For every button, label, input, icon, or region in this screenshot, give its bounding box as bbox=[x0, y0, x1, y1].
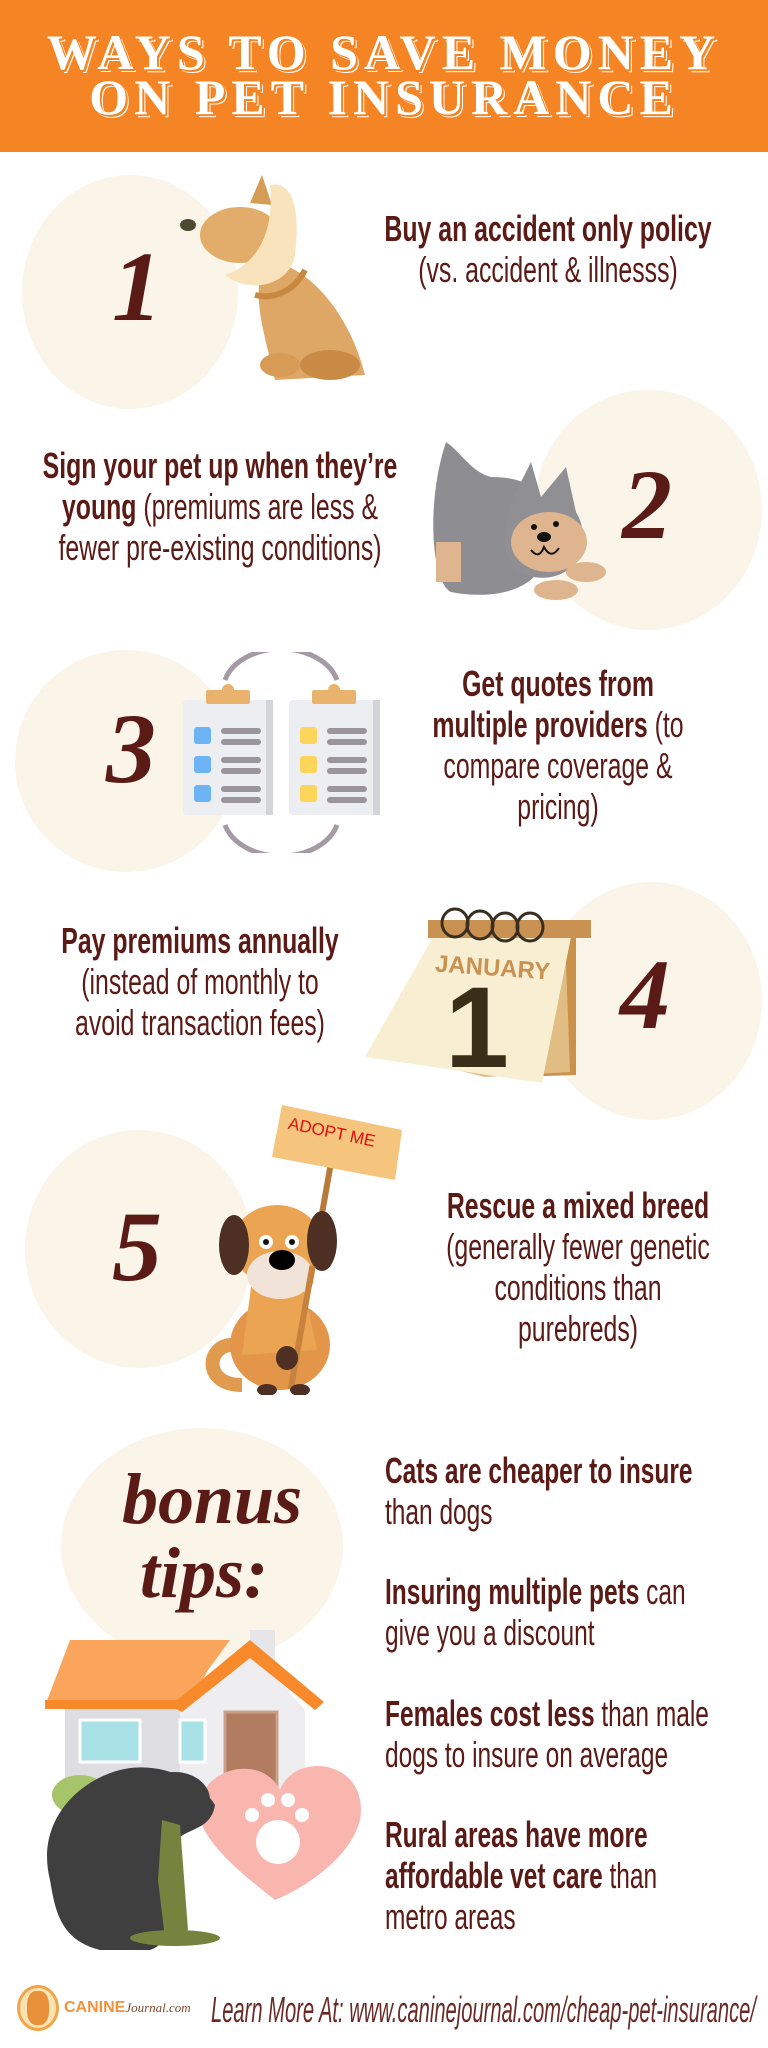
tip 2: Insuring multiple pets can bbox=[385, 1571, 686, 1612]
tip 3 bbox=[385, 1693, 709, 1775]
footer logo bbox=[17, 1985, 191, 2031]
circle 3 bbox=[15, 650, 237, 872]
text 5: conditions than bbox=[494, 1267, 662, 1308]
text 3: compare coverage & bbox=[443, 745, 673, 786]
footer logo: CANINEJournal.com bbox=[64, 1999, 191, 2016]
text 2: fewer pre-existing conditions) bbox=[58, 527, 382, 568]
text 2: Sign your pet up when they’re bbox=[43, 445, 397, 486]
tip 1 bbox=[385, 1450, 692, 1532]
bonus title: bonus bbox=[122, 1459, 302, 1539]
text 1: Buy an accident only policy bbox=[384, 208, 712, 249]
circle 4 bbox=[540, 882, 762, 1120]
text 5: Rescue a mixed breed bbox=[447, 1185, 709, 1226]
circle 1 bbox=[22, 175, 238, 409]
tip 1: than dogs bbox=[385, 1491, 493, 1532]
tip 4: metro areas bbox=[385, 1896, 516, 1937]
tip 4: Rural areas have more bbox=[385, 1814, 648, 1855]
text 5 bbox=[446, 1185, 710, 1349]
tip 4 bbox=[385, 1814, 657, 1937]
text 4: (instead of monthly to bbox=[81, 961, 319, 1002]
bonus tips text bbox=[385, 1450, 709, 1937]
circle 2 bbox=[534, 390, 762, 630]
tip 3: dogs to insure on average bbox=[385, 1734, 668, 1775]
text 3 bbox=[432, 663, 684, 827]
number 1: 1 bbox=[112, 231, 162, 342]
number 3: 3 bbox=[106, 693, 156, 804]
illustration: adopt me dog bbox=[206, 1105, 402, 1395]
bonus circle bbox=[61, 1428, 343, 1664]
footer text: Learn More At: www.caninejournal.com/cheap-pet-insurance/ bbox=[211, 1989, 756, 2030]
text 1 bbox=[384, 208, 712, 290]
illustration: adopt me dog: ADOPT ME bbox=[287, 1114, 377, 1151]
text 1: (vs. accident & illnesss) bbox=[418, 249, 678, 290]
text 4: avoid transaction fees) bbox=[75, 1002, 325, 1043]
text 3: multiple providers (to bbox=[432, 704, 684, 745]
illustration: house, cat, heart bbox=[45, 1630, 361, 1950]
tip 4: affordable vet care than bbox=[385, 1855, 657, 1896]
header: ON PET INSURANCE bbox=[89, 69, 679, 125]
number 5: 5 bbox=[112, 1191, 162, 1302]
tip 3: Females cost less than male bbox=[385, 1693, 709, 1734]
text 4 bbox=[61, 920, 339, 1043]
text 2 bbox=[43, 445, 397, 568]
tip 1: Cats are cheaper to insure bbox=[385, 1450, 692, 1491]
text 3: Get quotes from bbox=[462, 663, 654, 704]
bonus title: tips: bbox=[140, 1533, 268, 1613]
illustration: clipboards bbox=[183, 652, 380, 853]
tip 2 bbox=[385, 1571, 686, 1653]
header: WAYS TO SAVE MONEY bbox=[47, 24, 721, 80]
illustration: dog with cone bbox=[180, 175, 365, 380]
illustration: calendar: JANUARY bbox=[434, 951, 551, 986]
circle 5 bbox=[25, 1130, 253, 1368]
illustration: yorkie puppy bbox=[433, 442, 606, 600]
text 2: young (premiums are less & bbox=[62, 486, 378, 527]
number 2: 2 bbox=[622, 449, 672, 560]
text 3: pricing) bbox=[517, 786, 599, 827]
tip 2: give you a discount bbox=[385, 1612, 595, 1653]
text 5: (generally fewer genetic bbox=[446, 1226, 710, 1267]
number 4: 4 bbox=[620, 939, 670, 1050]
bonus title bbox=[122, 1459, 302, 1613]
header bbox=[0, 0, 768, 152]
illustration: calendar bbox=[365, 908, 591, 1085]
text 4: Pay premiums annually bbox=[61, 920, 339, 961]
text 5: purebreds) bbox=[518, 1308, 638, 1349]
